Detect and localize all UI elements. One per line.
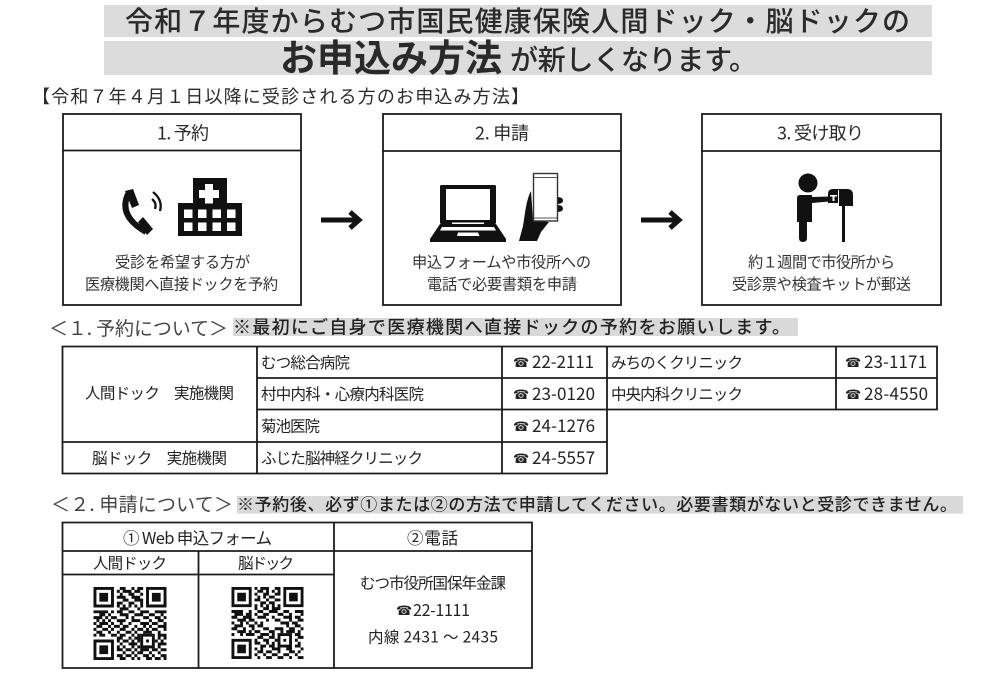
title: お申込み方法 [280,28,502,82]
table: medical institutions: みちのくクリニック [611,351,743,373]
section heading: about application: ＜２. 申請について＞ [51,490,233,517]
table: application methods: 22-1111 [413,597,470,621]
icon: hand holding smartphone [519,174,563,241]
title [104,0,932,82]
step 1 description: 受診を希望する方が [115,250,250,272]
section heading: about application: ※予約後、必ず①または②の方法で申請してください。必要書類がないと受診できません。 [237,490,957,516]
table: application methods: 内線 2431 ～ 2435 [368,626,498,648]
table: medical institutions: 脳ドック 実施機関 [92,446,227,468]
step 2 description: 電話で必要書類を申請 [427,272,577,294]
table: application methods: ☎ [396,604,412,619]
icon: telephone [125,189,161,235]
table: medical institutions: 中央内科クリニック [611,382,743,404]
icon: hospital [178,178,242,236]
table: application methods [62,522,532,668]
section heading: about reservation: ＜１. 予約について＞ [49,314,228,341]
arrow: step 1 to step 2 [321,212,359,228]
icon: laptop [430,185,506,242]
icon: person at mailbox [797,174,853,242]
step 1 description [85,250,278,294]
step 3 description: 約１週間で市役所から [748,250,895,272]
table: medical institutions: ☎ [513,388,529,403]
title: が新しくなります。 [510,38,757,78]
QR code: health checkup [94,588,166,659]
panel: step 2 application [382,114,621,305]
table: medical institutions: 23-1171 [864,348,927,373]
step 2 description [412,250,591,294]
step 3 description [732,250,911,294]
title: 令和７年度からむつ市国民健康保険人間ドック・脳ドックの [125,0,910,40]
table: application methods: 脳ドック [238,552,294,574]
table: medical institutions [62,346,937,474]
panel: step 1 reservation [62,114,301,305]
step 2 heading: 2. 申請 [475,120,529,146]
table: application methods: ① Web 申込フォーム [123,525,272,549]
section heading: about reservation: ※最初にご自身で医療機関へ直接ドックの予約をお願いします。 [233,314,790,340]
step 3 heading: 3. 受け取り [777,120,864,146]
table: application methods: ②電話 [407,525,458,549]
table: medical institutions: ☎ [513,356,529,371]
table: medical institutions: ☎ [513,420,529,435]
subheading: 【令和７年４月１日以降に受診される方のお申込み方法】 [32,83,529,109]
table: medical institutions: 人間ドック 実施機関 [85,382,234,404]
table: medical institutions: ☎ [845,356,861,371]
table: medical institutions: 24-1276 [532,412,595,437]
table: medical institutions: ふじた脳神経クリニック [261,446,423,468]
table: medical institutions: ☎ [513,452,529,467]
panel: step 3 receipt [701,114,941,305]
step 2 description: 申込フォームや市役所への [412,250,591,272]
table: application methods: 人間ドック [93,552,167,574]
table: medical institutions: 22-2111 [532,348,594,373]
step 1 description: 医療機関へ直接ドックを予約 [85,272,278,294]
table: medical institutions: 24-5557 [532,444,595,469]
QR code: brain checkup [232,588,304,658]
arrow: step 2 to step 3 [641,212,679,228]
table: medical institutions: 23-0120 [532,380,595,405]
table: medical institutions: むつ総合病院 [261,351,350,373]
table: medical institutions: ☎ [845,388,861,403]
table: medical institutions: 村中内科・心療内科医院 [261,382,424,404]
table: medical institutions: 28-4550 [864,380,928,405]
step 3 description: 受診票や検査キットが郵送 [732,272,911,294]
table: medical institutions: 菊池医院 [261,414,320,436]
table: application methods: むつ市役所国保年金課 [360,572,506,594]
step 1 heading: 1. 予約 [157,120,209,146]
